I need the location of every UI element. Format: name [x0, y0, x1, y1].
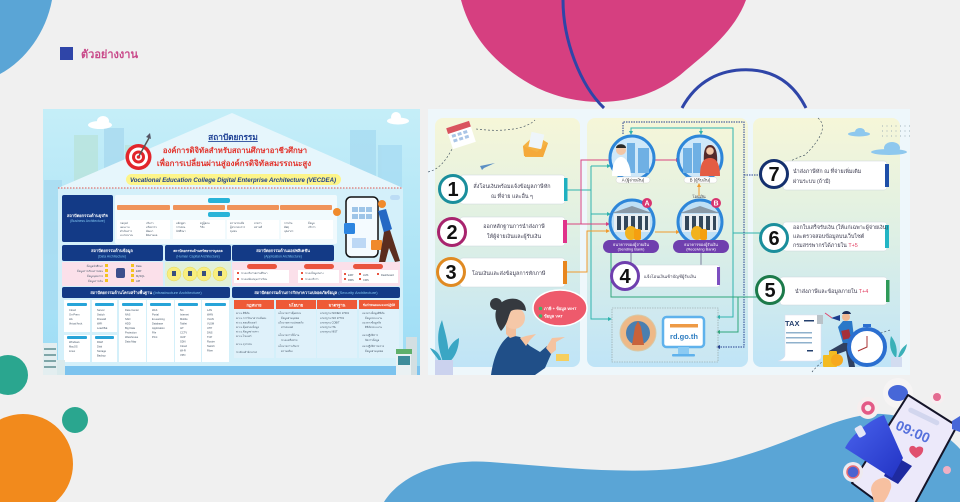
business architecture: ติดตามผล [146, 233, 158, 237]
data architecture: ข้อมูลนักศึกษา [86, 264, 104, 268]
security columns: สารสนเทศ [281, 325, 293, 329]
step 6: ออกใบเสร็จรับเงิน (ให้แก่เฉพาะผู้จ่ายเงิน) [793, 223, 888, 231]
title pill: Vocational Education College Digital Enterprise Architecture (VECDEA) [130, 177, 336, 184]
title: สถาปัตยกรรม [208, 132, 258, 142]
step 5: นำส่งภาษีและข้อมูลภายใน T+4 [795, 287, 868, 295]
step 5: 5 [764, 280, 776, 302]
human capital architecture [165, 245, 231, 286]
step 1: 1 [447, 179, 459, 201]
infrastructure columns: Windows [69, 340, 80, 344]
icon: small envelope [556, 354, 569, 361]
infrastructure columns: SDN [180, 340, 186, 344]
infrastructure columns: Data Center [125, 308, 139, 312]
icon: plant left [430, 320, 459, 375]
data architecture [62, 245, 163, 286]
business architecture: บริหาร [146, 221, 154, 225]
security architecture header: สถาปัตยกรรมด้านการรักษาความปลอดภัยข้อมูล (Security Architecture) [254, 289, 378, 296]
infrastructure columns: Wi-Fi [180, 348, 186, 352]
business architecture: อาคาร [254, 222, 262, 225]
human capital architecture: (Human Capital Architecture) [176, 254, 220, 258]
hand [871, 478, 891, 502]
security columns: แนวทางข้อมูลภัย [362, 320, 382, 324]
business architecture: สถาปัตยกรรมด้านธุรกิจ [67, 212, 109, 219]
megaphone [845, 415, 912, 484]
application architecture: Dashboard [381, 273, 394, 277]
infrastructure columns: Internet [180, 312, 189, 316]
icon: calendar [446, 121, 476, 149]
data architecture: ข้อมูลการเงิน [88, 279, 103, 283]
business architecture: นักศึกษา [176, 229, 186, 233]
business architecture: วิจัย [199, 225, 205, 229]
security columns: แนวปฏิบัติการตรวจ [362, 344, 385, 348]
blob: top-left circle [0, 0, 52, 74]
icon: paper plane [480, 163, 495, 170]
security columns: พ.ร.บ.คุ้มครองข้อมูล [236, 325, 259, 330]
business architecture: บริการ [308, 225, 316, 229]
person A: A (ผู้จ่ายเงิน) [622, 178, 645, 184]
security columns: นโยบาย [289, 302, 304, 308]
security columns: ความเสี่ยง [281, 349, 293, 353]
step 2: ออกหลักฐานการนำส่งภาษี [483, 223, 545, 230]
business architecture: ทรัพยากร [146, 225, 157, 229]
icon: plant right [890, 336, 907, 367]
security columns: มาตรฐาน [329, 302, 346, 308]
security columns: นโยบายการใช้งาน [278, 333, 299, 337]
step 3: โอนเงินและส่งข้อมูลการหักภาษี [472, 270, 546, 277]
infrastructure columns: Cloud [180, 344, 187, 348]
title [157, 132, 311, 169]
infrastructure columns: On-Prem [69, 312, 80, 316]
security columns: ข้อกำหนดและแนวปฏิบัติ [363, 302, 395, 308]
infrastructure columns: Warehouse [125, 335, 139, 339]
panel: VECDEA architecture infographic [43, 109, 420, 375]
business architecture: ความร่วมมือ [230, 221, 245, 225]
security columns: มาตรฐาน ITIL [320, 325, 337, 329]
application architecture: ระบบข้อมูลกลาง [305, 271, 324, 275]
bank A: (Sending Bank) [618, 246, 645, 252]
title: เพื่อการเปลี่ยนผ่านสู่องค์กรดิจิทัลสมรรถนะสูง [157, 157, 311, 169]
application architecture: RMS [348, 278, 354, 282]
security columns: พ.ร.บ.คอมพิวเตอร์ [236, 320, 257, 324]
infrastructure columns: Server [97, 308, 105, 312]
section heading: ตัวอย่างงาน [81, 48, 138, 61]
infrastructure columns: Router [207, 340, 215, 344]
business architecture: ดำเนินการ [120, 229, 133, 233]
infrastructure columns: Disk [97, 344, 103, 348]
infrastructure columns: Linux [69, 349, 76, 353]
speech bubble: ภาษี + ข้อมูล WHT [544, 305, 577, 312]
infrastructure columns: NAS [125, 312, 131, 316]
bank A: ธนาคารของผู้จ่ายเงิน [613, 242, 649, 248]
step 6: 6 [768, 228, 780, 250]
icon: coins [823, 351, 843, 367]
security columns [234, 300, 399, 358]
bank B: ธนาคารของผู้รับเงิน [684, 242, 718, 248]
column 3 background [753, 118, 900, 367]
infrastructure columns: IoT [180, 326, 184, 330]
building body [58, 188, 403, 368]
phone body [852, 395, 957, 502]
security architecture header [232, 287, 400, 298]
icon: chat bubble [883, 378, 913, 408]
infrastructure columns: Big Data [125, 326, 136, 330]
infrastructure columns: Tablet [180, 322, 187, 326]
business architecture: การสอน [176, 225, 186, 229]
application architecture: CMS [363, 278, 369, 282]
icon: revenue seal [620, 315, 656, 351]
step 2 [438, 217, 567, 246]
bottom stripe [43, 366, 420, 375]
infrastructure columns: Switch [97, 312, 105, 316]
security columns: นโยบายการคุ้มครอง [278, 311, 302, 316]
icon: coin [930, 390, 944, 404]
business architecture: การเงิน [284, 221, 293, 225]
security columns: กฎหมาย [247, 302, 262, 308]
column 2 background [587, 118, 748, 367]
illustration: right building [396, 337, 417, 375]
application architecture: (Application Architecture) [264, 254, 302, 258]
security columns: ระเบียบสำนักนายก [236, 350, 258, 354]
bank B [673, 198, 729, 253]
blob: small teal circle [62, 407, 88, 433]
step 1: ณ ที่จ่าย และอื่น ๆ [491, 192, 533, 200]
blob: bottom blue wave [384, 414, 960, 502]
section marker [60, 47, 73, 60]
infrastructure columns: VPN [180, 353, 185, 357]
application architecture: ERP [348, 273, 354, 277]
infrastructure columns: WAN [207, 312, 213, 316]
infrastructure columns: E-Learning [152, 317, 165, 321]
business architecture: แผนงาน [120, 226, 130, 229]
blob: top pink shape [461, 0, 746, 102]
business architecture: หลักสูตร [176, 221, 186, 225]
infrastructure columns: Mobile [180, 317, 188, 321]
security columns: มาตรฐาน NIST [320, 330, 338, 334]
infrastructure columns: RAM [97, 340, 103, 344]
infrastructure columns: LAN [207, 308, 212, 312]
small heart [943, 466, 951, 474]
security columns: พ.ร.บ.ไซเบอร์ [236, 334, 252, 338]
icon: target [126, 133, 152, 170]
infrastructure columns: VLSM [207, 322, 214, 326]
infrastructure architecture header: สถาปัตยกรรมด้านโครงสร้างพื้นฐาน (Infrastructure Architecture) [90, 288, 202, 296]
data architecture: ข้อมูลการเรียนการสอน [77, 269, 103, 273]
speech bubble [533, 290, 587, 326]
security columns: ข้อมูลส่วนบุคคล [365, 349, 384, 354]
infrastructure columns: HA [69, 317, 73, 321]
infrastructure columns: Cloud [69, 308, 76, 312]
side icon [952, 416, 960, 432]
data architecture: สถาปัตยกรรมด้านข้อมูล [91, 247, 133, 254]
infrastructure architecture header [62, 287, 230, 298]
person A [610, 136, 654, 184]
title: องค์การดิจิทัลสำหรับสถานศึกษาอาชีวศึกษา [163, 146, 307, 155]
business architecture: (Business Architecture) [70, 219, 105, 223]
security columns: พ.ร.บ.ข้อมูลข่าวสาร [236, 330, 259, 334]
infrastructure columns: File [152, 330, 157, 334]
security columns: แนวปฏิบัติการ [362, 333, 379, 337]
column 1 background [435, 118, 580, 367]
application architecture: ระบบบริหารสถานศึกษา [241, 271, 268, 275]
security columns: ข้อมูลส่วนบุคคล [281, 316, 300, 321]
bank B: (Receiving Bank) [686, 246, 717, 252]
infrastructure columns: MacOS [69, 344, 78, 348]
infrastructure columns: TCP [207, 335, 212, 339]
data architecture: ข้อมูลบุคลากร [87, 274, 104, 279]
illustration: woman [490, 298, 565, 375]
infrastructure columns: HDD [125, 322, 131, 326]
step 2: ให้ผู้จ่ายเงินและผู้รับเงิน [487, 232, 541, 240]
infrastructure columns: Data Map [125, 340, 137, 344]
step 7: ผ่านระบบ (ถ้ามี) [793, 178, 831, 185]
infrastructure columns: Storage [97, 349, 107, 353]
security columns: พ.ร.บ.ดิจิทัล [236, 311, 250, 315]
arrowheads [606, 131, 720, 349]
security columns: จัดการข้อมูล [365, 338, 380, 342]
blob: bottom-left orange circle [0, 414, 73, 502]
infrastructure columns: UTP [207, 326, 212, 330]
infrastructure columns: Web [152, 308, 158, 312]
security columns: มาตรฐาน COBIT [320, 320, 340, 324]
security columns: มาตรฐาน ISO/IEC 27001 [320, 311, 350, 315]
infrastructure columns: VoIP [180, 335, 186, 339]
infrastructure columns: Portal [152, 312, 159, 316]
business architecture: บุคลากร [284, 230, 294, 234]
infrastructure columns: WiFi [97, 322, 103, 326]
decorative dashed path [428, 118, 890, 372]
business architecture: งบประมาณ [120, 233, 134, 237]
step 3 [438, 258, 567, 287]
security columns: นโยบายความปลอดภัย [278, 320, 304, 324]
application architecture: ระบบสนับสนุนการเรียน [241, 277, 267, 282]
bank B: B [713, 200, 719, 208]
phone search bar [907, 407, 940, 426]
step 4 [612, 262, 720, 290]
infrastructure columns: Virtual Arch. [69, 322, 83, 326]
panel: tax process infographic [428, 109, 912, 375]
step 7: นำส่งภาษีหัก ณ ที่จ่ายเพิ่มเติม [793, 167, 862, 175]
icon: envelope [523, 132, 548, 157]
step 6: และตรวจสอบข้อมูลบนเว็บไซต์ [793, 232, 865, 240]
business architecture: ชุมชน [230, 229, 237, 234]
step 4: 4 [619, 266, 631, 288]
data architecture: (Data Architecture) [98, 254, 126, 258]
infrastructure columns: Print [152, 335, 158, 339]
step 6: กรมสรรพากรได้ภายใน T+5 [793, 241, 858, 249]
infrastructure columns [64, 300, 229, 362]
infrastructure columns: Load Bal. [97, 326, 108, 330]
infrastructure columns: VLAN [207, 317, 214, 321]
data architecture: API [136, 279, 140, 283]
step 1: สั่งโอนเงินพร้อมแจ้งข้อมูลภาษีหัก [473, 182, 551, 190]
security columns: พ.ร.บ.ธุรกรรม [236, 342, 252, 347]
bank A: A [644, 200, 650, 208]
clouds and dots [848, 128, 907, 155]
title pill [126, 174, 341, 185]
application architecture: LMS [363, 273, 369, 277]
step 1 [440, 175, 568, 204]
infrastructure columns: CCTV [180, 330, 187, 334]
blob: bottom-left teal circle [0, 355, 28, 395]
infrastructure columns: DNS [207, 330, 213, 334]
data architecture: ERP [136, 269, 142, 273]
city skyline [44, 128, 402, 310]
person B [678, 136, 722, 184]
security columns: นโยบายการบริหาร [278, 344, 300, 348]
infrastructure columns: 5G [180, 308, 183, 312]
illustration: left building [43, 343, 65, 375]
infrastructure columns: Firewall [97, 317, 106, 321]
illustration: tax document: TAX [785, 319, 799, 328]
illustration: man with megaphone [825, 311, 855, 367]
icon: clock [849, 324, 885, 365]
revenue department box [612, 308, 718, 362]
step 7: 7 [768, 164, 780, 186]
person B: B (ผู้รับเงิน) [690, 178, 711, 184]
roof [58, 113, 403, 188]
infrastructure columns: Database [152, 322, 164, 326]
icon: gear [857, 397, 879, 419]
icon: heart [909, 446, 923, 458]
illustration: phone and person [333, 195, 400, 263]
data architecture: Data [136, 264, 142, 268]
security columns: พ.ร.บ.การรักษาความมั่นคง [236, 316, 267, 320]
business architecture [62, 195, 337, 244]
icon: monitor rd.go.th: rd.go.th [670, 332, 698, 341]
business architecture: พัฒนา [146, 229, 154, 233]
illustration: phone and megaphone [843, 378, 960, 502]
step 3: 3 [445, 262, 457, 284]
business architecture: กลยุทธ์ [120, 221, 128, 226]
business architecture: ครูผู้สอน [200, 221, 210, 225]
connectors [567, 122, 770, 347]
business architecture: ข้อมูล [308, 221, 315, 225]
security columns: ระบบเครือข่าย [281, 338, 298, 342]
step 2: 2 [446, 222, 458, 244]
infrastructure columns: SAN [125, 317, 130, 321]
application architecture: ระบบบริการ [305, 277, 319, 281]
application architecture [232, 245, 400, 286]
application architecture: สถาปัตยกรรมด้านแอปพลิเคชัน [256, 247, 310, 253]
step 7 [760, 160, 889, 190]
label: transfer: โอนเงิน [692, 194, 706, 199]
business architecture: พัสดุ [284, 225, 289, 230]
security columns: ข้อมูลระบบงาน [365, 316, 382, 320]
data architecture: MySQL [136, 274, 145, 278]
step 5 [756, 276, 890, 305]
security columns: มาตรฐาน ISO 27701 [320, 316, 345, 320]
security columns: แนวทางข้อมูลดิจิทัล [362, 311, 385, 315]
infrastructure columns: Protection [125, 330, 137, 334]
illustration: tax document [778, 315, 823, 361]
step 4: แจ้งโอนเงินเข้าบัญชีผู้รับเงิน [644, 273, 696, 280]
infrastructure columns: Switch [207, 344, 215, 348]
infrastructure columns: Application [152, 326, 165, 330]
target badge [843, 462, 863, 482]
clouds [88, 112, 409, 129]
speech bubble: ข้อมูล VAT [544, 312, 563, 320]
business architecture: ผู้ประกอบการ [230, 225, 246, 229]
security columns: ดิจิทัลระบบงาน [365, 325, 382, 329]
human capital architecture: สถาปัตยกรรมด้านทรัพยากรบุคคล [173, 248, 223, 254]
decorative blue curve [563, 0, 806, 108]
step 6 [760, 222, 889, 252]
business architecture: สถานที่ [254, 225, 262, 229]
bank A [603, 198, 659, 253]
infrastructure columns: Backup [97, 354, 106, 358]
infrastructure columns: Fiber [207, 348, 213, 352]
phone time: 09:00 [893, 417, 933, 446]
